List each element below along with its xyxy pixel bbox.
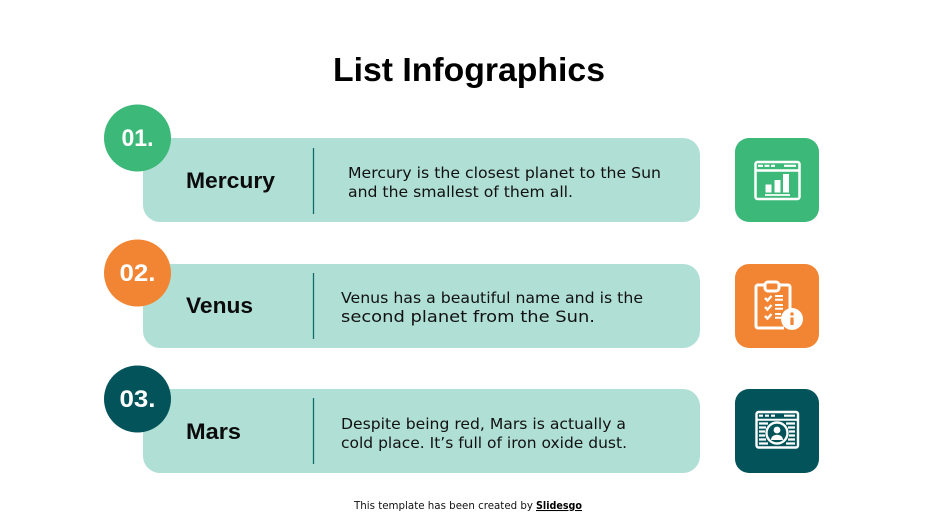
badge: 02: [104, 240, 171, 306]
icon: browser window with bar chart: [735, 138, 819, 222]
text: Venus description: Venus has a beautiful name and is the: [341, 290, 643, 307]
title: List Infographics: [333, 52, 605, 89]
text: Venus description: second planet from the Sun.: [341, 307, 595, 326]
badge: 01: [104, 104, 171, 172]
text: Venus description: [341, 290, 643, 326]
text: Mars description: [341, 416, 627, 452]
heading: Venus: Venus: [186, 293, 253, 318]
text: Mars description: Despite being red, Mars is actually a: [341, 416, 626, 433]
panel: Mercury: [143, 138, 700, 222]
badge: 03: [104, 366, 171, 432]
text: Mercury description: and the smallest of them all.: [348, 184, 573, 201]
heading: Mercury: Mercury: [186, 168, 275, 193]
footer credit: Slidesgo: [536, 500, 582, 512]
icon: clipboard checklist with info: [735, 264, 819, 348]
footer credit: This template has been created by: [353, 500, 533, 512]
text: Mercury description: Mercury is the closest planet to the Sun: [348, 165, 661, 182]
heading: Mars: Mars: [186, 419, 241, 444]
text: Mars description: cold place. It’s full of iron oxide dust.: [341, 435, 627, 452]
badge: 03: 03.: [120, 386, 156, 413]
icon: browser window with profile: [735, 389, 819, 473]
badge: 02: 02.: [120, 260, 156, 287]
badge: 01: 01.: [122, 125, 154, 152]
panel: Mars: [143, 389, 700, 473]
text: Mercury description: [348, 165, 661, 201]
panel: Venus: [143, 264, 700, 348]
